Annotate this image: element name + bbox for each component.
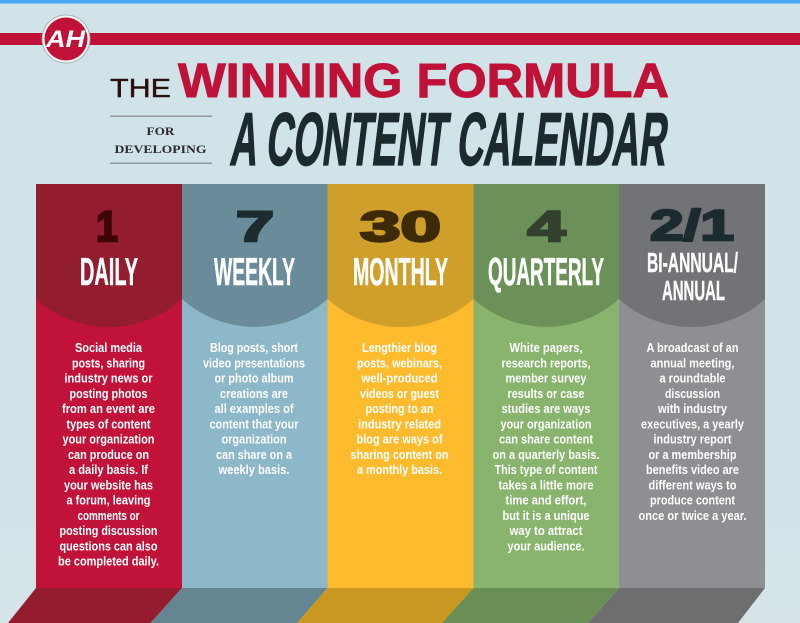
text: quarterly description: takes a little more xyxy=(498,478,594,492)
text: weekly description: all examples of xyxy=(214,402,294,416)
text: weekly description: content that your xyxy=(210,417,299,431)
text: bi-annual description: produce content xyxy=(650,494,736,508)
panel: weekly: WEEKLY xyxy=(214,251,295,294)
text: monthly description: posts, webinars, xyxy=(357,356,442,370)
text: daily description: posting photos xyxy=(70,387,148,401)
text: weekly description: creations are xyxy=(220,387,288,401)
text: monthly description: a monthly basis. xyxy=(357,463,442,477)
text: daily description: can produce on xyxy=(68,448,149,462)
text: quarterly description xyxy=(492,341,600,553)
text: monthly description xyxy=(350,341,448,477)
text: daily description: industry news or xyxy=(64,372,153,386)
text: monthly description: Lengthier blog xyxy=(362,341,437,355)
text: daily description: comments or xyxy=(78,509,140,523)
text: monthly description: posting to an xyxy=(366,402,434,416)
text: bi-annual description: A broadcast of an xyxy=(646,341,738,355)
text: daily description: questions can also xyxy=(60,539,158,553)
text: daily description xyxy=(58,341,159,568)
title: winning formula: WINNING FORMULA xyxy=(178,55,669,108)
icon: AH logo xyxy=(42,15,90,63)
text: daily description: from an event are xyxy=(62,402,155,416)
text: quarterly description: White papers, xyxy=(510,341,582,355)
text: bi-annual description: annual meeting, xyxy=(650,356,734,370)
panel: quarterly xyxy=(442,184,619,623)
text: bi-annual description xyxy=(638,341,746,523)
panel: weekly xyxy=(150,184,328,623)
label: bi-annual/annual: ANNUAL xyxy=(662,275,725,306)
text: quarterly description: way to attract xyxy=(509,524,583,538)
text: daily description: Social media xyxy=(75,341,143,355)
text: monthly description: industry related xyxy=(358,417,441,431)
text: monthly description: sharing content on xyxy=(350,448,448,462)
title: for developing: DEVELOPING xyxy=(114,144,207,156)
label: daily: DAILY xyxy=(80,251,138,294)
text: quarterly description: research reports, xyxy=(502,356,590,370)
text: quarterly description: results or case xyxy=(508,387,584,401)
panel: daily xyxy=(8,184,182,623)
text: bi-annual description: different ways to xyxy=(648,478,737,492)
label: bi-annual/annual xyxy=(647,247,738,306)
title: for developing: FOR xyxy=(146,126,175,138)
number: 1: 1 xyxy=(96,203,118,251)
text: weekly description: or photo album xyxy=(214,372,294,386)
text: quarterly description: member survey xyxy=(506,372,586,386)
text: daily description: your organization xyxy=(62,432,154,446)
text: weekly description: can share on a xyxy=(216,448,293,462)
text: bi-annual description: industry report xyxy=(654,432,732,446)
text: bi-annual description: benefits video are xyxy=(646,463,739,477)
text: monthly description: well-produced xyxy=(361,372,438,386)
text: monthly description: videos or guest xyxy=(360,387,440,401)
title xyxy=(110,55,673,181)
panel: quarterly: QUARTERLY xyxy=(488,251,604,294)
text: quarterly description: your organization xyxy=(500,417,592,431)
number: 2/1: 2/1 xyxy=(650,202,734,250)
text: bi-annual description: discussion xyxy=(665,387,720,401)
text: bi-annual description: with industry xyxy=(657,402,727,416)
text: quarterly description: This type of content xyxy=(494,463,598,477)
text: weekly description: video presentations xyxy=(203,356,305,370)
text: daily description: be completed daily. xyxy=(58,554,159,568)
text: quarterly description: your audience. xyxy=(508,539,584,553)
label: monthly: MONTHLY xyxy=(353,251,448,294)
red header bar xyxy=(0,33,800,45)
text: weekly description: weekly basis. xyxy=(218,463,290,477)
text: quarterly description: but it is a unique xyxy=(502,509,590,523)
text: quarterly description: can share content xyxy=(499,432,594,446)
icon: AH logo: AH xyxy=(45,26,86,53)
text: daily description: a forum, leaving xyxy=(66,494,150,508)
text: quarterly description: studies are ways xyxy=(502,402,590,416)
text: quarterly description: on a quarterly basis. xyxy=(492,448,600,462)
text: weekly description xyxy=(203,341,305,477)
text: daily description: posting discussion xyxy=(60,524,158,538)
text: bi-annual description: or a membership xyxy=(648,448,737,462)
text: daily description: posts, sharing xyxy=(72,356,145,370)
text: weekly description: organization xyxy=(222,432,286,446)
title: for developing xyxy=(110,116,212,164)
text: daily description: types of content xyxy=(66,417,151,431)
text: bi-annual description: once or twice a year. xyxy=(638,509,746,523)
text: bi-annual description: a roundtable xyxy=(660,372,726,386)
text: daily description: your website has xyxy=(64,478,153,492)
panel: bi-annual / annual xyxy=(588,184,765,623)
text: daily description: a daily basis. If xyxy=(69,463,149,477)
title: the: THE xyxy=(110,73,171,103)
number: 30: 30 xyxy=(360,203,441,251)
text: monthly description: blog are ways of xyxy=(356,432,443,446)
text: weekly description: Blog posts, short xyxy=(210,341,299,355)
panel: monthly xyxy=(297,184,474,623)
number: 4: 4 xyxy=(528,203,566,251)
text: bi-annual description: executives, a yearly xyxy=(641,417,744,431)
text: quarterly description: time and effort, xyxy=(506,494,586,508)
number: 7: 7 xyxy=(236,203,274,251)
